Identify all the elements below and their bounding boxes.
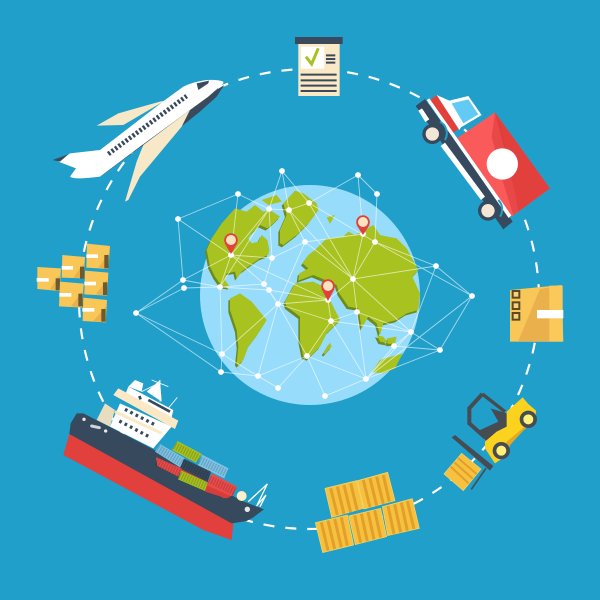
icon: stacked crates bottom — [315, 472, 419, 553]
network nodes — [133, 168, 475, 399]
icon: delivery truck — [416, 95, 550, 229]
network lines — [136, 171, 472, 396]
dashed route ring — [79, 69, 539, 529]
icon: checklist document — [295, 37, 343, 96]
box 2 — [62, 255, 85, 279]
icon: stacked small boxes left — [37, 244, 110, 322]
continents — [205, 191, 420, 373]
globe — [200, 185, 420, 405]
box 5 — [84, 271, 108, 296]
icon: map pin Africa — [321, 279, 335, 301]
box 4 — [59, 282, 84, 308]
icon: airplane — [53, 80, 224, 202]
icon: map pin Russia — [356, 215, 370, 235]
box 3 — [86, 244, 110, 269]
icon: cargo ship — [63, 380, 267, 540]
icon: forklift — [444, 394, 537, 491]
box 6 — [82, 298, 107, 322]
icon: map pin America — [224, 233, 238, 254]
icon: cardboard box right — [510, 285, 563, 342]
box 1 — [37, 267, 61, 291]
